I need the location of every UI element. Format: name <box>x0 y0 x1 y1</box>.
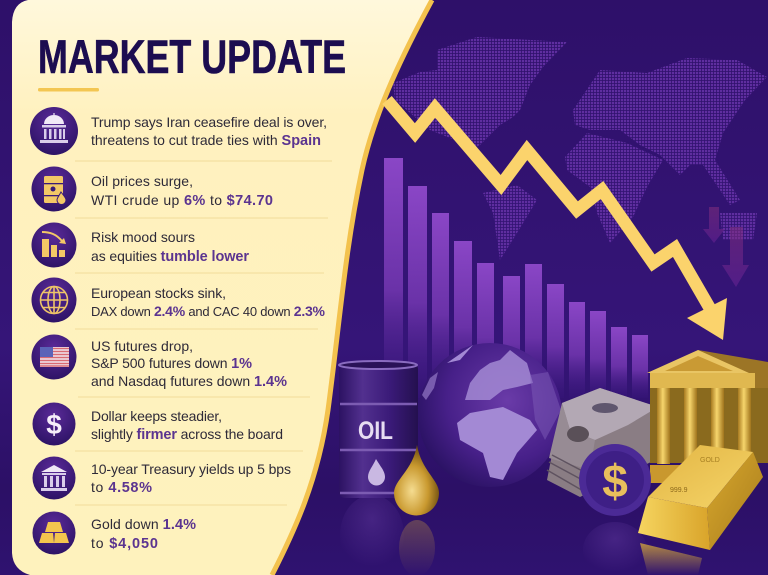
item 7: Treasury: 10-year Treasury yields up 5 bps <box>91 461 291 477</box>
floor reflections <box>340 495 702 575</box>
item 7: Treasury <box>32 456 291 500</box>
cash stack <box>547 388 658 497</box>
dollar coin <box>579 444 651 516</box>
item 1: Iran / Spain <box>30 107 327 155</box>
item 3: risk mood <box>32 222 249 268</box>
gold bank <box>647 350 768 483</box>
icon: US flag <box>32 334 76 380</box>
icon: bank <box>32 456 76 500</box>
item 1: Iran / Spain: threatens to cut trade ties with Spain <box>91 132 321 149</box>
icon: gold bars <box>32 512 76 554</box>
gold bar <box>638 445 763 550</box>
item 6: dollar <box>32 402 283 446</box>
oil barrel: OIL <box>358 417 393 445</box>
icon: dollar sign <box>32 402 76 446</box>
item 4: European stocks <box>32 278 326 322</box>
item 5: US futures: S&P 500 futures down 1% <box>91 355 252 372</box>
bar chart <box>384 158 648 398</box>
gold bar: GOLD <box>700 457 720 464</box>
item 7: Treasury: to 4.58% <box>91 479 152 496</box>
gold oil drop <box>394 445 439 516</box>
world map <box>393 37 767 260</box>
icon: globe <box>32 278 76 322</box>
icon: oil barrel <box>32 166 76 212</box>
title underline <box>38 88 99 92</box>
item 6: dollar: Dollar keeps steadier, <box>91 408 222 424</box>
small down arrows <box>703 207 749 287</box>
item 1: Iran / Spain: Trump says Iran ceasefire deal is over, <box>91 114 327 130</box>
icon: capitol <box>30 107 78 155</box>
item 6: dollar: slightly firmer across the board <box>91 426 283 443</box>
icon: falling bars <box>32 222 76 268</box>
item 5: US futures: US futures drop, <box>91 338 193 354</box>
icon: dollar sign: $ <box>46 409 62 440</box>
item 8: gold: Gold down 1.4% <box>91 516 196 533</box>
item 2: oil <box>32 166 273 212</box>
item 5: US futures: and Nasdaq futures down 1.4% <box>91 373 287 390</box>
gold panel edge <box>272 0 432 575</box>
item 2: oil: Oil prices surge, <box>91 173 193 189</box>
dividers <box>75 161 332 505</box>
item 3: risk mood: Risk mood sours <box>91 229 195 245</box>
globe <box>418 343 562 487</box>
item 3: risk mood: as equities tumble lower <box>91 248 249 265</box>
falling arrow <box>387 100 727 340</box>
item 8: gold: to $4,050 <box>91 535 158 552</box>
title: MARKET UPDATE <box>38 30 346 83</box>
item 2: oil: WTI crude up 6% to $74.70 <box>91 192 273 209</box>
cream panel <box>12 0 432 575</box>
item 4: European stocks: European stocks sink, <box>91 285 226 301</box>
item 8: gold <box>32 512 196 554</box>
item 4: European stocks: DAX down 2.4% and CAC 40 down 2.3% <box>91 303 326 319</box>
oil barrel <box>339 361 418 498</box>
dollar coin: $ <box>602 455 628 507</box>
item 5: US futures <box>32 334 287 390</box>
gold bar: 999.9 <box>670 487 688 494</box>
